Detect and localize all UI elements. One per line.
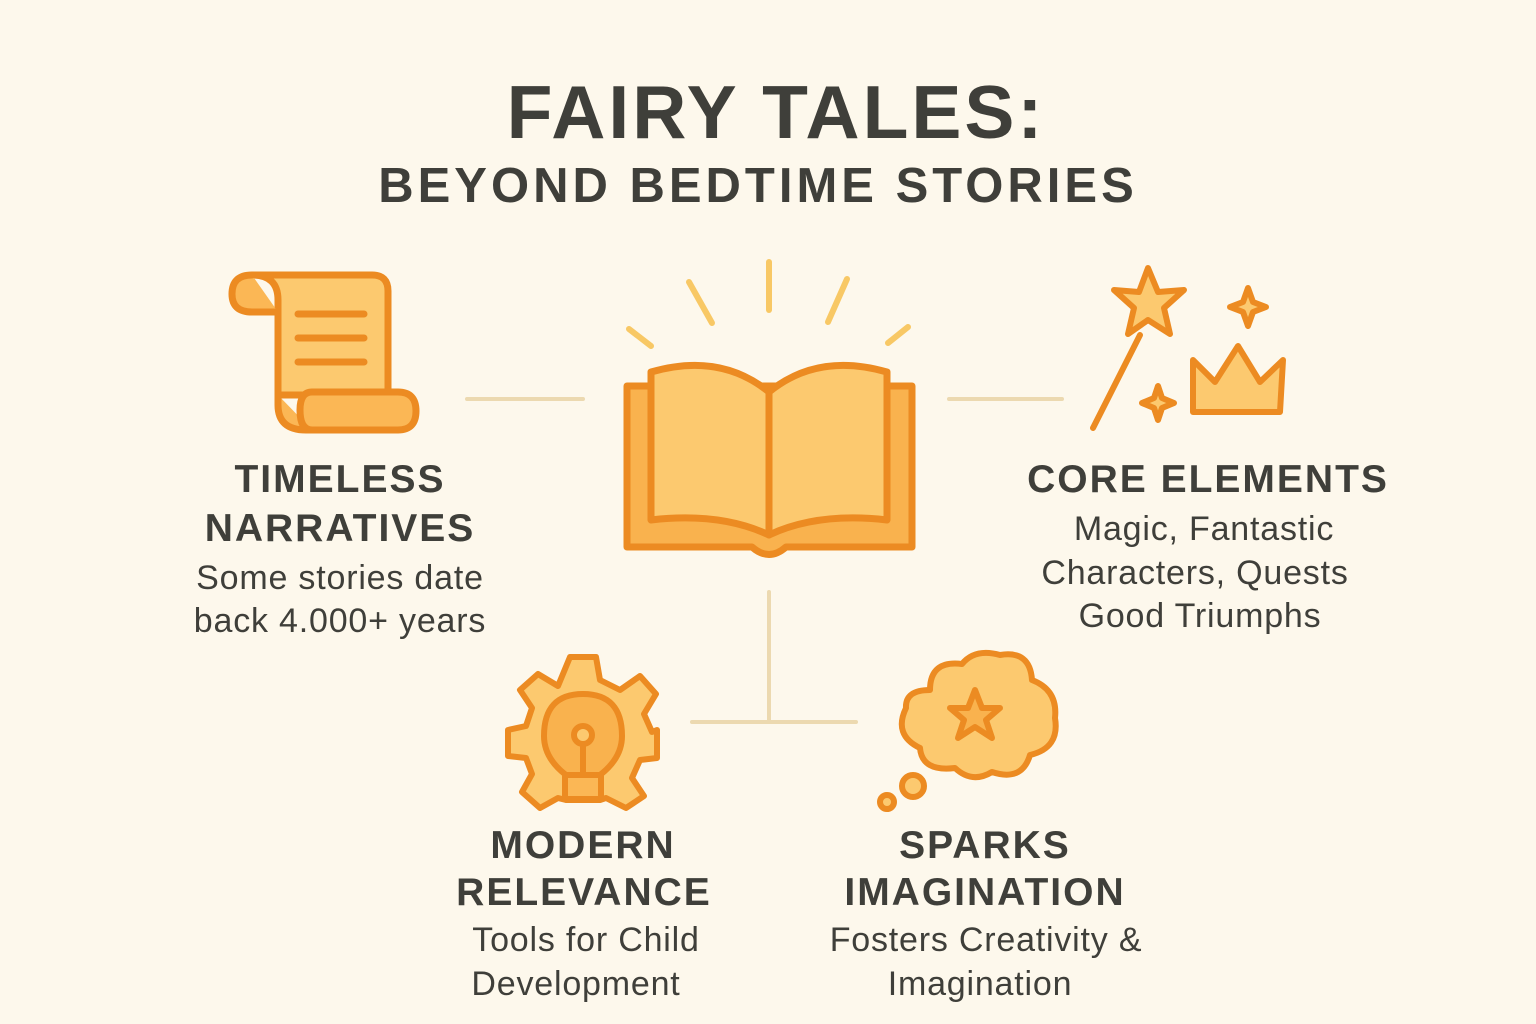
text: core elements: CORE ELEMENTS: [1027, 458, 1389, 501]
text: core elements: Good Triumphs: [1079, 597, 1321, 635]
text: timeless narratives: TIMELESS: [234, 458, 446, 501]
text: modern relevance: MODERN: [490, 824, 676, 867]
text: core elements: [1027, 458, 1389, 635]
title: BEYOND BEDTIME STORIES: [378, 159, 1138, 213]
text: timeless narratives: NARRATIVES: [205, 507, 475, 550]
text: modern relevance: RELEVANCE: [456, 871, 712, 914]
text: timeless narratives: Some stories date: [196, 559, 484, 597]
text: timeless narratives: [194, 458, 486, 640]
icon: scroll: [232, 275, 416, 430]
text: core elements: Magic, Fantastic: [1074, 510, 1334, 548]
icon: gear with lightbulb: [508, 657, 657, 808]
text: modern relevance: Tools for Child: [472, 921, 700, 959]
icon: wand, sparkles and crown: [1093, 268, 1283, 428]
title: [378, 70, 1138, 213]
text: sparks imagination: [830, 824, 1142, 1003]
text: sparks imagination: IMAGINATION: [844, 871, 1126, 914]
title: FAIRY TALES:: [507, 70, 1045, 154]
text: sparks imagination: SPARKS: [899, 824, 1071, 867]
text: core elements: Characters, Quests: [1041, 554, 1349, 592]
text: modern relevance: Development: [471, 965, 681, 1003]
text: modern relevance: [456, 824, 712, 1003]
connector lines: [467, 399, 1062, 722]
icon: open book with rays: [627, 262, 912, 554]
text: sparks imagination: Fosters Creativity &: [830, 921, 1142, 959]
icon: thought cloud with star: [880, 653, 1056, 809]
text: sparks imagination: Imagination: [888, 965, 1072, 1003]
text: timeless narratives: back 4.000+ years: [194, 602, 486, 640]
